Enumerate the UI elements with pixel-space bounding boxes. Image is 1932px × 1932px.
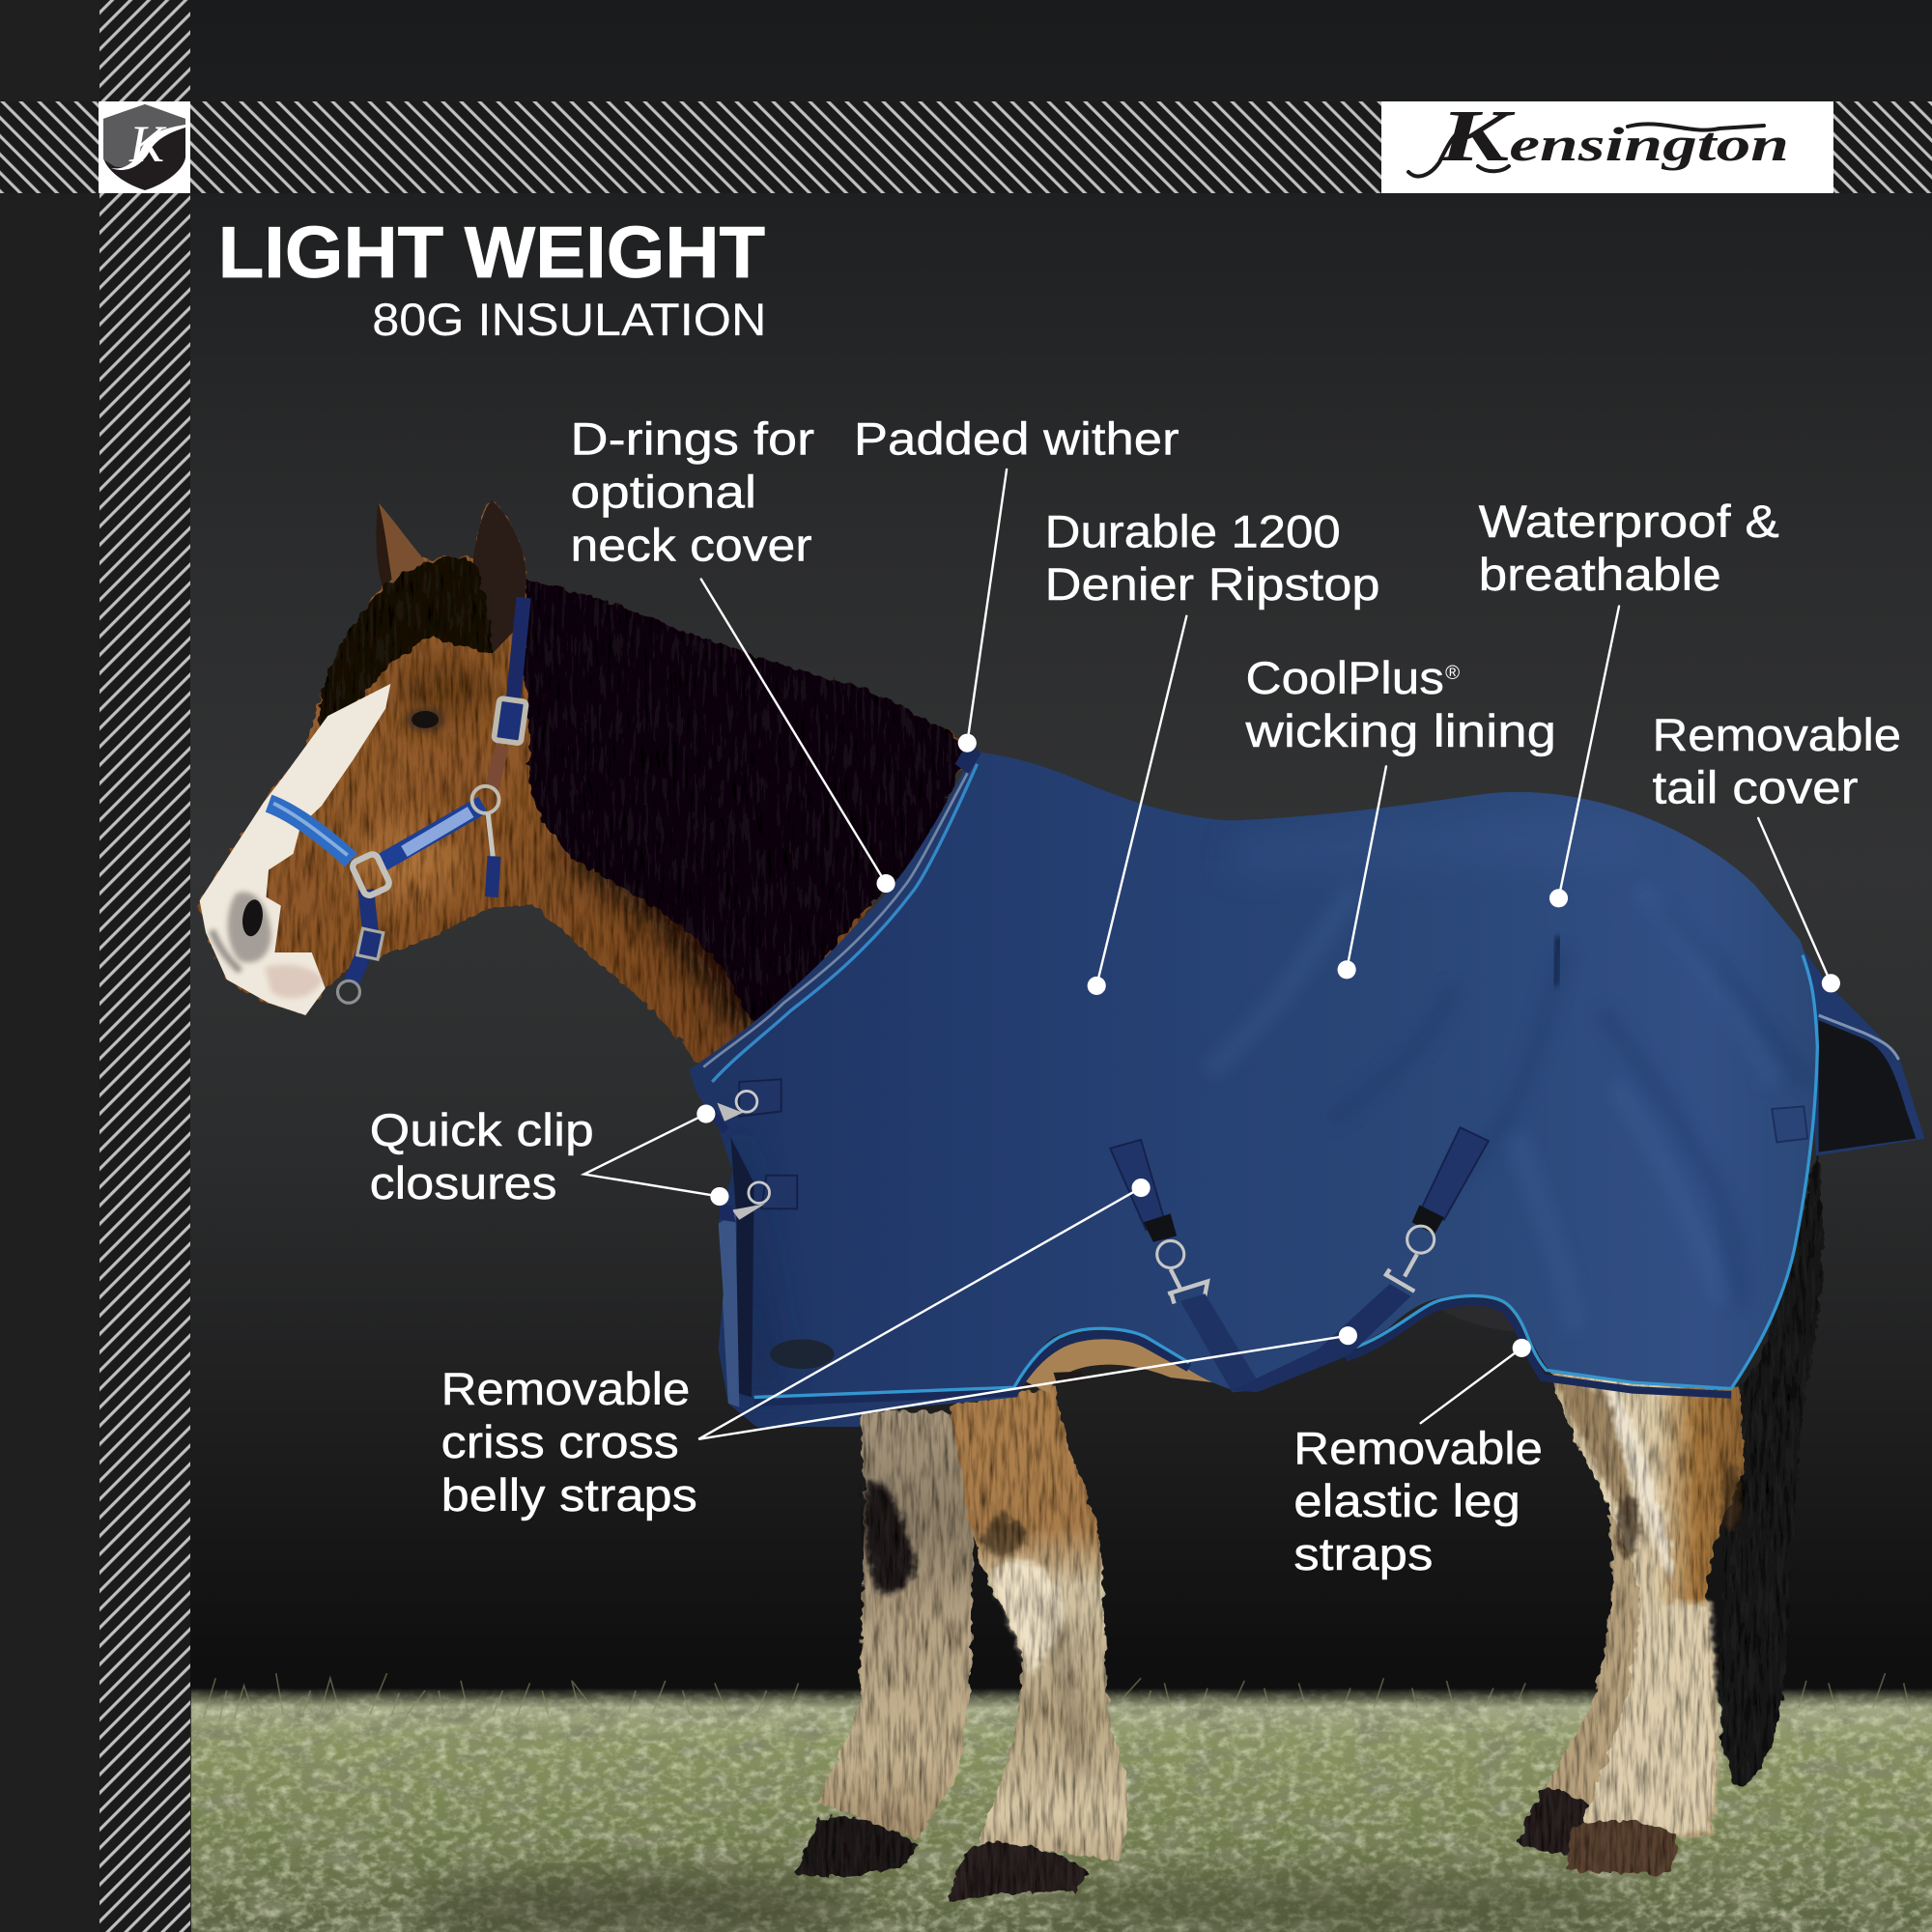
halter: [269, 598, 526, 1003]
callout: padded wither: [854, 414, 1179, 753]
callout: tail cover: Removable: [1652, 710, 1901, 761]
callout: quick clip closures: closures: [370, 1158, 557, 1209]
tail: [1718, 1152, 1823, 1789]
right ear: [473, 500, 526, 653]
blanket folds and shading: [719, 815, 1811, 1407]
callout: D-rings: [571, 414, 895, 893]
rear-most tail cover flap: [1780, 918, 1924, 1155]
white blaze and muzzle: [200, 684, 390, 1015]
callout: belly straps: Removable: [441, 1364, 690, 1415]
belly showing between straps: [1023, 1301, 1531, 1392]
horse: [200, 500, 1924, 1902]
callout: leg straps: [1293, 1339, 1543, 1580]
callout: tail cover: tail cover: [1652, 763, 1858, 814]
neck and head coat: [200, 500, 974, 1067]
callout: lining: CoolPlus: [1246, 653, 1444, 704]
callout: D-rings: D-rings for: [571, 414, 814, 466]
callout: belly straps: criss cross: [441, 1417, 679, 1468]
eye: [406, 707, 444, 732]
callout: waterproof: Waterproof &: [1479, 497, 1779, 548]
rear belly strap: [1233, 1127, 1489, 1392]
side tab near rump: [1772, 1106, 1807, 1142]
callout: waterproof: breathable: [1479, 550, 1721, 601]
near hind leg: [1551, 1370, 1744, 1875]
near front leg: [949, 1386, 1128, 1902]
brand shield logo: K: [128, 115, 167, 173]
callout: quick clip closures: [370, 1104, 728, 1209]
mane: [524, 579, 969, 1041]
callout: quick clip closures: Quick clip: [370, 1105, 594, 1156]
grass field: [191, 1673, 1932, 1932]
callout: padded wither: Padded wither: [854, 414, 1179, 466]
callout: D-rings: neck cover: [571, 520, 812, 571]
callout: lining: [1244, 653, 1556, 979]
callout: D-rings: optional: [571, 468, 756, 519]
brand patch: [770, 1339, 835, 1369]
callout: waterproof: [1479, 497, 1779, 907]
far front leg: [795, 1412, 974, 1876]
callout: tail cover: [1652, 710, 1901, 992]
chest closures: [708, 1079, 797, 1222]
horizontal hatched band: [0, 101, 1932, 193]
callout: belly straps: [441, 1179, 1357, 1521]
callout: leg straps: elastic leg: [1293, 1476, 1520, 1527]
neck binding piping: [703, 771, 969, 1067]
callout: lining: wicking lining: [1244, 706, 1556, 757]
chest overlap: [730, 1137, 754, 1397]
left ear: [376, 502, 425, 589]
callout: ripstop: [1045, 506, 1380, 995]
callout: ripstop: Denier Ripstop: [1045, 559, 1380, 611]
callout: belly straps: belly straps: [441, 1470, 697, 1521]
brand wordmark: [1381, 96, 1833, 193]
blanket body: [689, 752, 1817, 1427]
forelock: [318, 557, 492, 734]
callout: ripstop: Durable 1200: [1045, 506, 1341, 557]
vertical hatched band: [99, 0, 190, 1932]
blanket under-hem shadow: [756, 1407, 860, 1427]
turnout blanket: [689, 739, 1817, 1427]
callout: leg straps: Removable: [1293, 1423, 1543, 1474]
callout: leg straps: straps: [1293, 1529, 1433, 1580]
callout: lining: ®: [1445, 663, 1460, 684]
bottom and rear hem piping: [754, 955, 1817, 1403]
front belly strap: [1110, 1140, 1263, 1392]
brand shield logo: [99, 101, 190, 193]
title: LIGHT WEIGHT: [218, 212, 765, 293]
brand wordmark: K ensington: [1438, 96, 1789, 177]
subtitle: 80G INSULATION: [372, 295, 766, 346]
far hind leg: [1518, 1516, 1651, 1856]
